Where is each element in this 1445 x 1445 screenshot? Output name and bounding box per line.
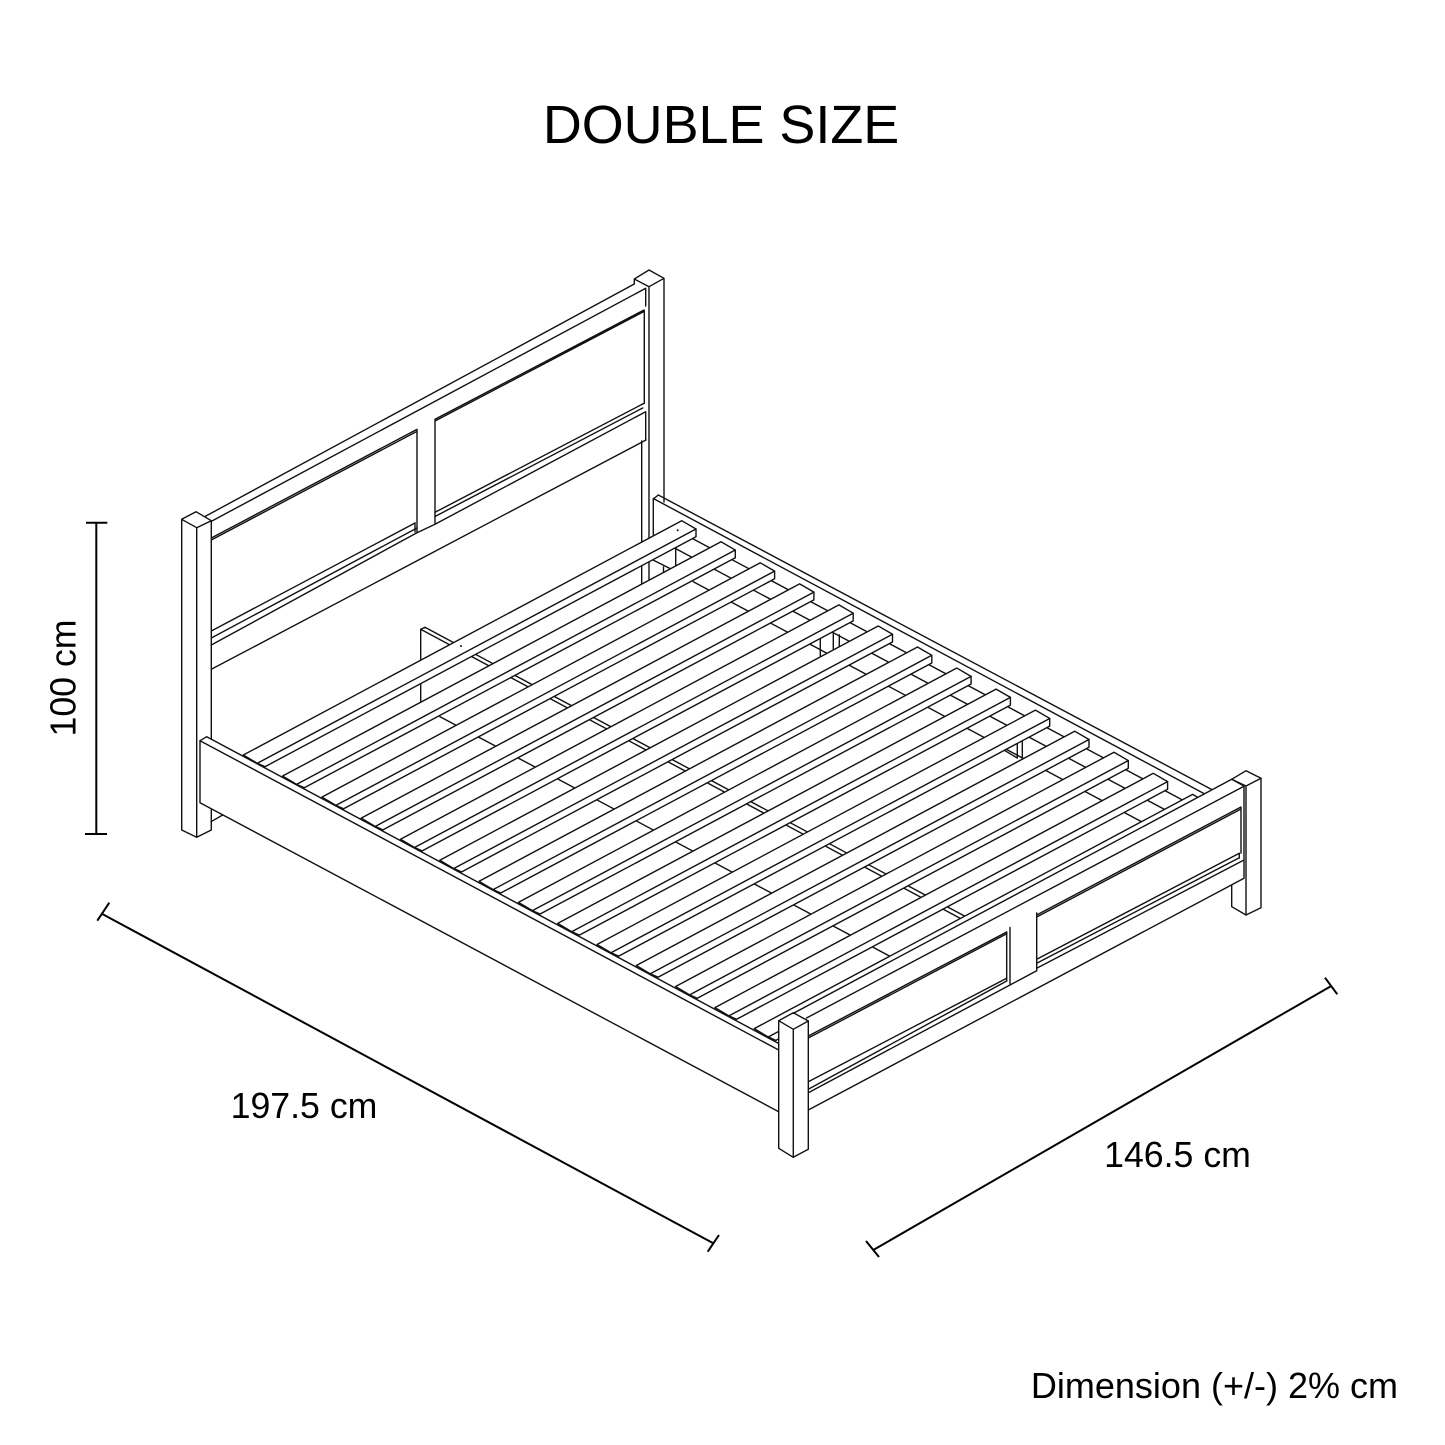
height dimension line (85, 523, 107, 834)
slats (243, 521, 1207, 1040)
footboard right post (1232, 771, 1261, 915)
rear side rail (653, 495, 1214, 812)
footboard rails and panels (793, 779, 1244, 1110)
headboard left post (182, 512, 211, 837)
front side rail (200, 737, 779, 1112)
width label: 146.5 cm (1104, 1135, 1251, 1175)
length dimension line (97, 903, 719, 1252)
height label: 100 cm (44, 619, 84, 737)
headboard rails and panels (205, 284, 646, 669)
bed line drawing (182, 270, 1261, 1157)
centre support beams under slats (421, 548, 1190, 967)
headboard right post (634, 270, 664, 590)
length label: 197.5 cm (231, 1086, 377, 1126)
footboard left post (779, 1013, 808, 1157)
title: DOUBLE SIZE (543, 95, 899, 155)
width dimension line (866, 978, 1337, 1257)
tolerance note: Dimension (+/-) 2% cm (1031, 1365, 1398, 1406)
